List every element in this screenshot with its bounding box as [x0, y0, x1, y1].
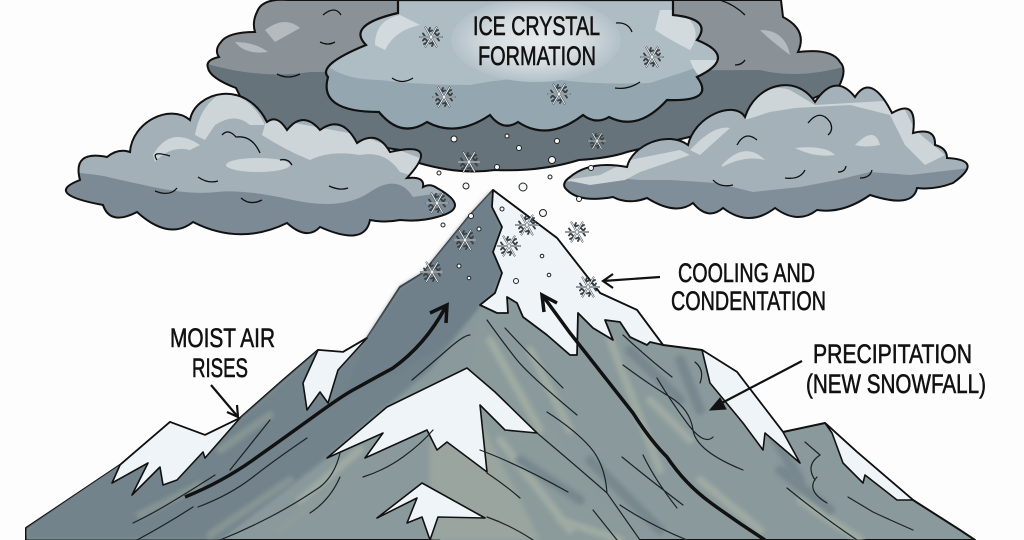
main cloud [320, 0, 720, 131]
falling snowflakes [421, 133, 606, 296]
label: ice crystal formation [473, 11, 600, 71]
snow patch: lower center [327, 368, 537, 472]
arrow: cooling pointer [603, 274, 660, 288]
mountain silhouette [26, 190, 975, 540]
label: ice crystal formation: FORMATION [478, 41, 596, 71]
label: cooling and condentation [671, 258, 826, 316]
storm clouds [60, 0, 970, 236]
back clouds [200, 0, 850, 180]
label: moist air rises: MOIST AIR [170, 323, 275, 353]
arrow: left air flow [185, 305, 447, 497]
snow patch: far right peak [825, 423, 913, 500]
rock shading and streaks [26, 190, 860, 540]
snowflakes in cloud [420, 28, 663, 106]
snow patch: right flank [702, 350, 800, 463]
left cloud [60, 80, 460, 236]
label: precipitation [806, 339, 986, 399]
snow patch: far left peak [112, 418, 240, 495]
summit snowfield [480, 190, 663, 355]
label: ice crystal formation: ICE CRYSTAL [473, 11, 600, 41]
label: precipitation: PRECIPITATION [813, 339, 972, 369]
label: cooling and condentation: COOLING AND [678, 258, 815, 288]
summit dark face [343, 190, 502, 395]
rock crease lines [133, 320, 913, 540]
label: cooling and condentation: CONDENTATION [671, 286, 826, 316]
label: moist air rises: RISES [192, 353, 248, 383]
snow patch: lower base [377, 483, 485, 540]
arrow: right air flow [542, 295, 765, 540]
arrow: precipitation pointer [710, 361, 802, 410]
arrow: moist air pointer [211, 385, 238, 417]
cloud curls [392, 23, 640, 88]
mountain [26, 190, 975, 540]
right cloud [560, 70, 970, 218]
snow patch: left shoulder [303, 338, 367, 410]
label: moist air rises [170, 323, 275, 383]
